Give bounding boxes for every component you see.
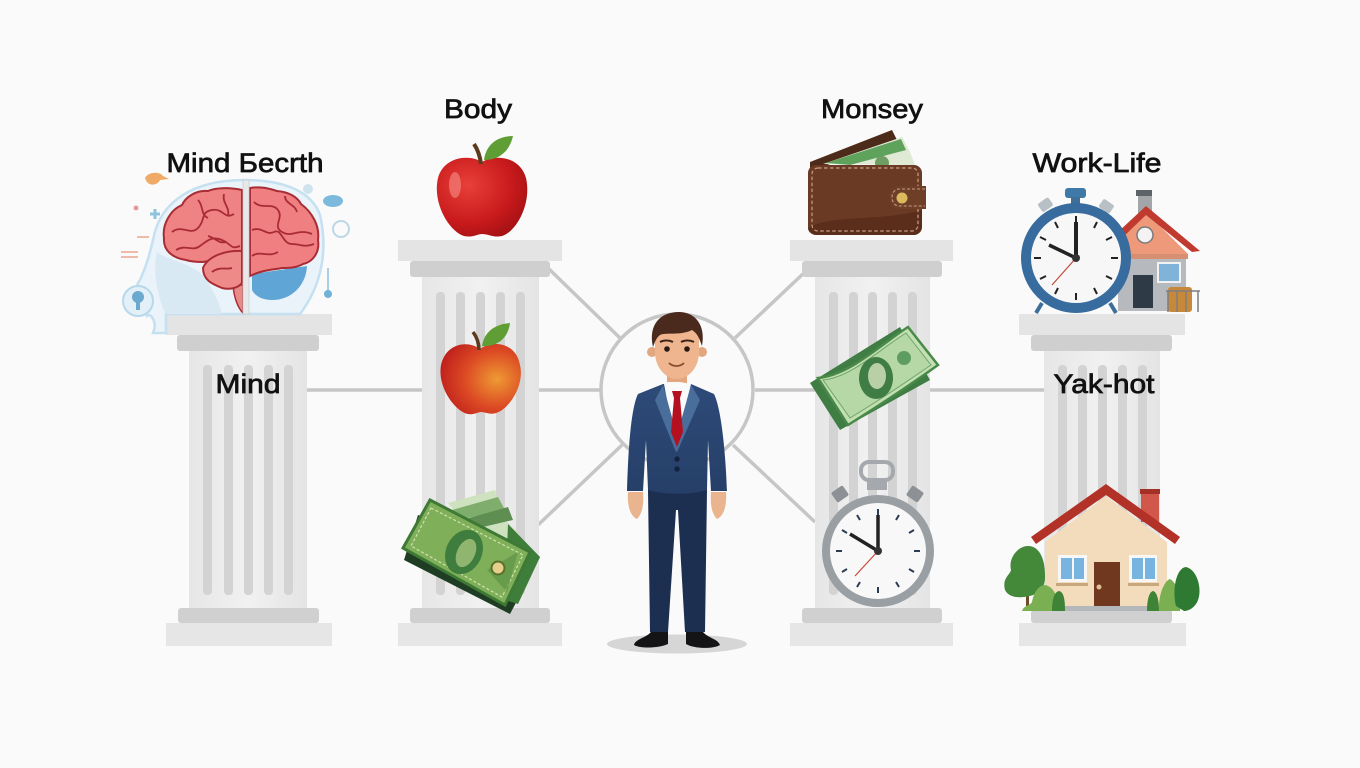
door	[1094, 562, 1120, 606]
buttons	[674, 456, 680, 472]
windows	[1056, 555, 1159, 586]
brain stem	[233, 285, 243, 313]
face profile	[155, 252, 222, 314]
legs	[648, 490, 707, 632]
icon: silver stopwatch	[826, 462, 930, 603]
pillar: Mind	[166, 314, 332, 646]
heading: Body: Body	[444, 94, 513, 124]
hands	[628, 492, 643, 519]
label: Yak-hot on pillar: Yak-hot	[1054, 369, 1155, 399]
left hemisphere	[164, 188, 242, 262]
icon: small house behind clock	[1118, 190, 1200, 312]
eyes and brows	[660, 340, 694, 352]
figure: businessman	[607, 312, 747, 654]
bushes	[1022, 585, 1063, 611]
cerebellum	[252, 266, 307, 300]
pillar: Work-Life	[1019, 314, 1186, 646]
chimney	[1141, 490, 1159, 522]
pillar: Money	[790, 240, 953, 646]
shirt	[664, 382, 691, 448]
ears	[647, 347, 657, 357]
shoes	[634, 632, 668, 648]
icon: blue stopwatch	[1026, 188, 1126, 313]
icon: apple on Body pillar	[437, 136, 527, 237]
hair	[652, 312, 703, 347]
neck	[667, 368, 687, 388]
icon: apple on Body pillar shaft	[440, 323, 521, 414]
central divider	[243, 180, 249, 314]
ground shadow	[607, 634, 747, 654]
wall	[1045, 496, 1167, 606]
left tree	[1026, 578, 1029, 606]
icon: house with trees	[1004, 484, 1200, 611]
roof	[1031, 484, 1180, 544]
right hemisphere	[250, 187, 318, 276]
icon: banknotes on Money pillar	[810, 327, 938, 430]
tie	[671, 391, 683, 447]
face	[655, 328, 699, 379]
step	[1062, 606, 1152, 611]
pillar: Body	[398, 240, 562, 646]
head silhouette	[136, 180, 323, 333]
icon: stack of banknotes	[403, 490, 540, 614]
heading: Work-Life: Work-Life	[1032, 148, 1162, 178]
connector lines and hub circle	[307, 269, 1044, 525]
jacket	[627, 384, 727, 494]
lapels	[655, 385, 680, 452]
label: Mind on pillar: Mind	[216, 369, 280, 399]
icon: head with brain	[121, 173, 349, 333]
icon: brown wallet	[808, 130, 926, 235]
heading: Monsey: Monsey	[821, 94, 924, 124]
heading: Mind Becrth: Mind Бecrth	[166, 148, 324, 178]
smile	[669, 363, 684, 366]
decorative science marks	[121, 173, 349, 316]
